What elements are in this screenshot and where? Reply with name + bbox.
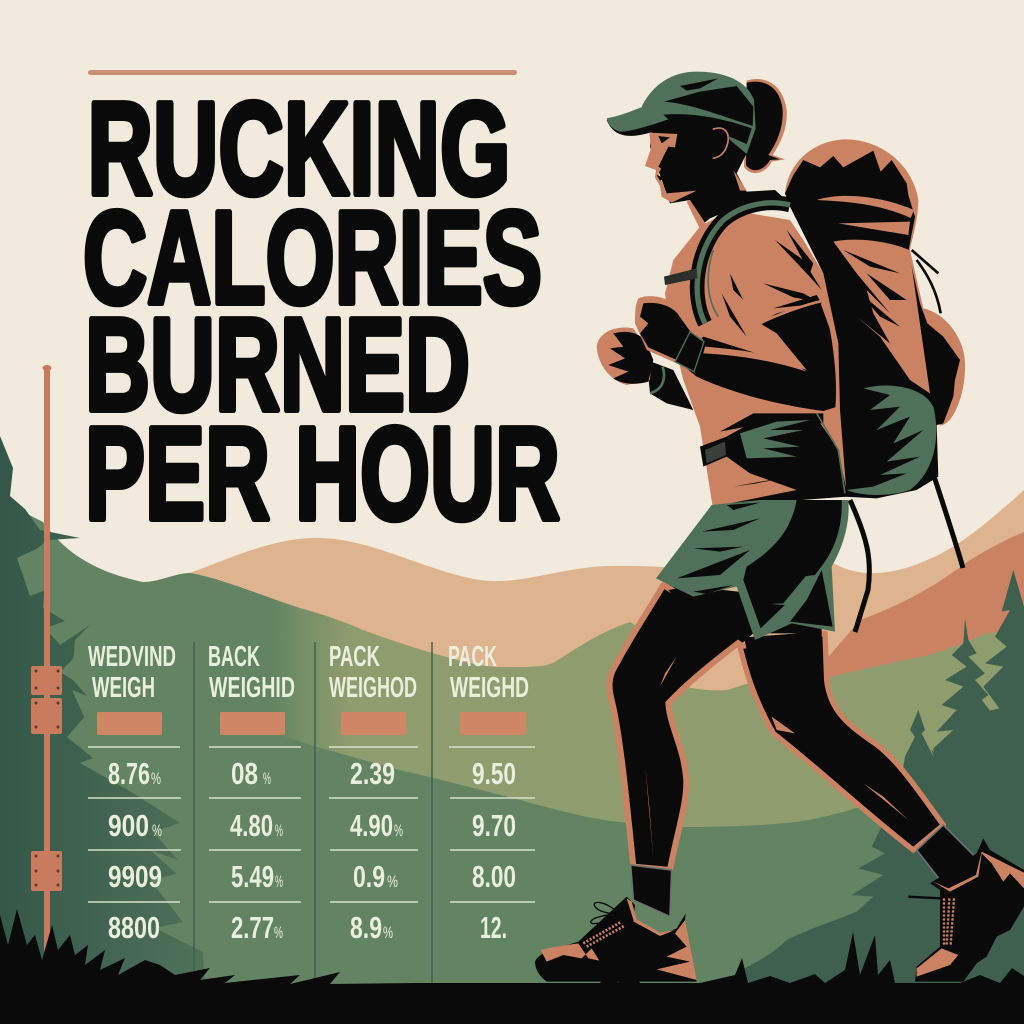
right pine trees and dark hill [740, 570, 1024, 983]
column 2: 5.49 [231, 859, 274, 894]
backpack top and side terracotta [785, 139, 965, 497]
title: RUCKING [88, 75, 510, 222]
face highlight [645, 133, 697, 203]
column 3: % [383, 923, 393, 942]
column 1: 8800 [108, 910, 160, 945]
left pine tree [0, 436, 205, 990]
column 3: 4.90 [350, 808, 393, 843]
column 4: 8.00 [472, 859, 516, 894]
ponytail [744, 79, 787, 173]
column 1: % [151, 769, 161, 788]
column 3: 0.9 [353, 859, 385, 894]
column 1 [88, 641, 176, 945]
data table [88, 641, 535, 985]
black ground with grass [0, 909, 1024, 1024]
title: BURNED [85, 291, 470, 438]
sleeve edge [760, 300, 837, 408]
title [83, 75, 560, 547]
column 4: WEIGHD [450, 672, 529, 704]
column dividers [194, 642, 432, 985]
column 2: % [275, 821, 283, 840]
column 2: % [274, 923, 283, 942]
column 2: 08 [231, 756, 258, 791]
thigh join [667, 583, 822, 680]
top rule [88, 70, 517, 75]
cap [607, 72, 756, 154]
column 3: PACK [329, 641, 380, 673]
column 2: 4.80 [230, 808, 273, 843]
main arm [677, 302, 837, 411]
dangling straps [850, 470, 963, 632]
legs, shorts and shoes [535, 500, 1024, 982]
column 2: 2.77 [231, 910, 274, 945]
backpack black body [785, 151, 960, 498]
rear arm and wristband [647, 360, 693, 410]
column 1: WEIGH [92, 672, 155, 704]
title: CALORIES [83, 184, 542, 331]
green bottom pouch [847, 386, 936, 495]
shorts [656, 500, 849, 640]
rear shoe [908, 838, 1024, 982]
front leg [610, 585, 747, 870]
column 1: 8.76 [108, 756, 150, 791]
backpack [785, 139, 965, 498]
forearm highlight [703, 347, 807, 372]
column 4: 12. [480, 910, 507, 945]
column 1: % [152, 821, 162, 840]
column 3: % [387, 872, 398, 891]
waist belt [700, 413, 847, 493]
rear leg [740, 633, 943, 850]
backpack terracotta folds [817, 196, 930, 393]
trail marker post [31, 365, 62, 985]
column 4: PACK [448, 641, 497, 673]
column 1: WEDVIND [88, 641, 176, 673]
shoulder strap [697, 203, 790, 323]
front shoe [535, 897, 697, 982]
column 2: % [275, 872, 283, 891]
column 2: % [263, 769, 271, 788]
socks [631, 825, 977, 917]
column 4 [448, 641, 529, 945]
chest strap [664, 268, 697, 285]
column 3: WEIGHOD [329, 672, 417, 704]
shirt shading [713, 230, 847, 507]
column 2 [208, 641, 295, 945]
column 1: 900 [108, 808, 149, 843]
landscape hills [0, 490, 1024, 1024]
hiker figure [535, 72, 1024, 982]
column 4: 9.70 [472, 808, 516, 843]
column 3 [329, 641, 417, 945]
column 3: 8.9 [350, 910, 382, 945]
column 4: 9.50 [472, 756, 516, 791]
column 2: BACK [208, 641, 260, 673]
column 2: WEIGHID [209, 672, 295, 704]
title: PER HOUR [85, 400, 560, 547]
column 3: 2.39 [350, 756, 395, 791]
lower fist [597, 327, 653, 385]
head silhouette [650, 97, 793, 225]
upper fist and watch [635, 296, 704, 372]
pack strap cords [912, 250, 941, 313]
shirt [665, 210, 847, 507]
column 1: 9909 [108, 859, 162, 894]
column 3: % [394, 821, 403, 840]
ear [713, 128, 728, 158]
row lines [88, 747, 535, 902]
torso, arms, head [597, 72, 847, 507]
